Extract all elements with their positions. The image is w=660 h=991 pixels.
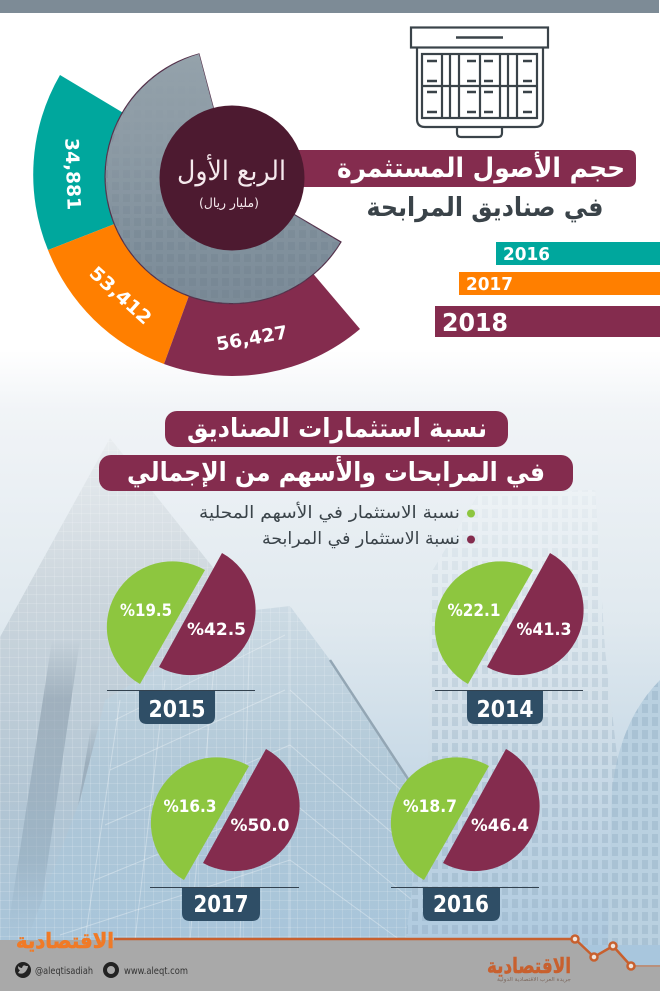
logo: orange wordmark: الاقتصادية xyxy=(16,929,114,953)
pie: 2014: %22.1 xyxy=(448,601,500,621)
sector: 2018: 56,427 xyxy=(215,322,289,356)
heading pill 1: نسبة استثمارات الصناديق xyxy=(187,414,487,444)
subtitle: في صناديق المرابحة xyxy=(366,193,604,223)
pie: 2016: 2016 xyxy=(433,892,489,918)
logo: newspaper wordmark: الاقتصادية xyxy=(487,954,571,978)
social: twitter: @aleqtisadiah xyxy=(35,966,93,977)
pie: 2015: %42.5 xyxy=(187,620,246,640)
legend: 2018: 2018 xyxy=(442,308,508,337)
legend: 2018 xyxy=(435,306,660,337)
radial chart xyxy=(33,54,360,376)
pie: 2017 xyxy=(150,749,300,921)
sector: 2016: 34,881 xyxy=(60,138,84,210)
pie: 2016: %46.4 xyxy=(471,816,529,836)
legend: 2017 xyxy=(459,272,660,295)
social: website: www.aleqt.com xyxy=(124,966,188,977)
pie: 2017: %50.0 xyxy=(230,816,290,836)
heading pill 2: في المرابحات والأسهم من الإجمالي xyxy=(127,456,545,488)
pie: 2014: 2014 xyxy=(476,697,534,723)
legend: murabaha: نسبة الاستثمار في المرابحة xyxy=(262,529,460,549)
page background xyxy=(0,350,660,991)
title bar: حجم الأصول المستثمرة xyxy=(337,151,625,184)
legend: 2016: 2016 xyxy=(503,244,550,265)
legend: 2016 xyxy=(496,242,660,265)
center circle xyxy=(160,106,304,250)
top bar xyxy=(0,0,659,13)
pie: 2014: %41.3 xyxy=(516,620,572,640)
pie: 2016: %18.7 xyxy=(403,797,457,817)
pie: 2017: 2017 xyxy=(194,892,248,918)
pie: 2015 xyxy=(107,553,256,724)
pie: 2014 xyxy=(435,553,584,724)
sector: 2018 xyxy=(164,178,360,376)
logo: newspaper wordmark xyxy=(487,954,571,983)
footer band xyxy=(0,940,660,991)
pie: 2015: 2015 xyxy=(148,697,206,723)
icon: filing tray xyxy=(411,28,548,137)
footer trend line xyxy=(114,936,660,970)
sector: 2017 xyxy=(48,178,232,364)
sector: 2017: 53,412 xyxy=(85,263,155,329)
center circle: الربع الأول xyxy=(177,153,286,187)
pie: 2016 xyxy=(391,749,540,921)
social: twitter xyxy=(15,962,93,978)
center circle: (مليار ريال) xyxy=(199,195,259,211)
legend: local stocks: نسبة الاستثمار في الأسهم المحلية xyxy=(199,502,460,523)
pie: 2015: %19.5 xyxy=(120,601,172,621)
sector: 2016 xyxy=(33,75,232,250)
background skyline xyxy=(0,438,660,950)
logo: newspaper wordmark: جريدة العرب الاقتصادية الدولية xyxy=(497,977,571,983)
inner gray sector xyxy=(105,54,341,304)
social: website xyxy=(105,964,188,977)
pie: 2017: %16.3 xyxy=(164,797,216,817)
legend: 2017: 2017 xyxy=(466,274,513,295)
